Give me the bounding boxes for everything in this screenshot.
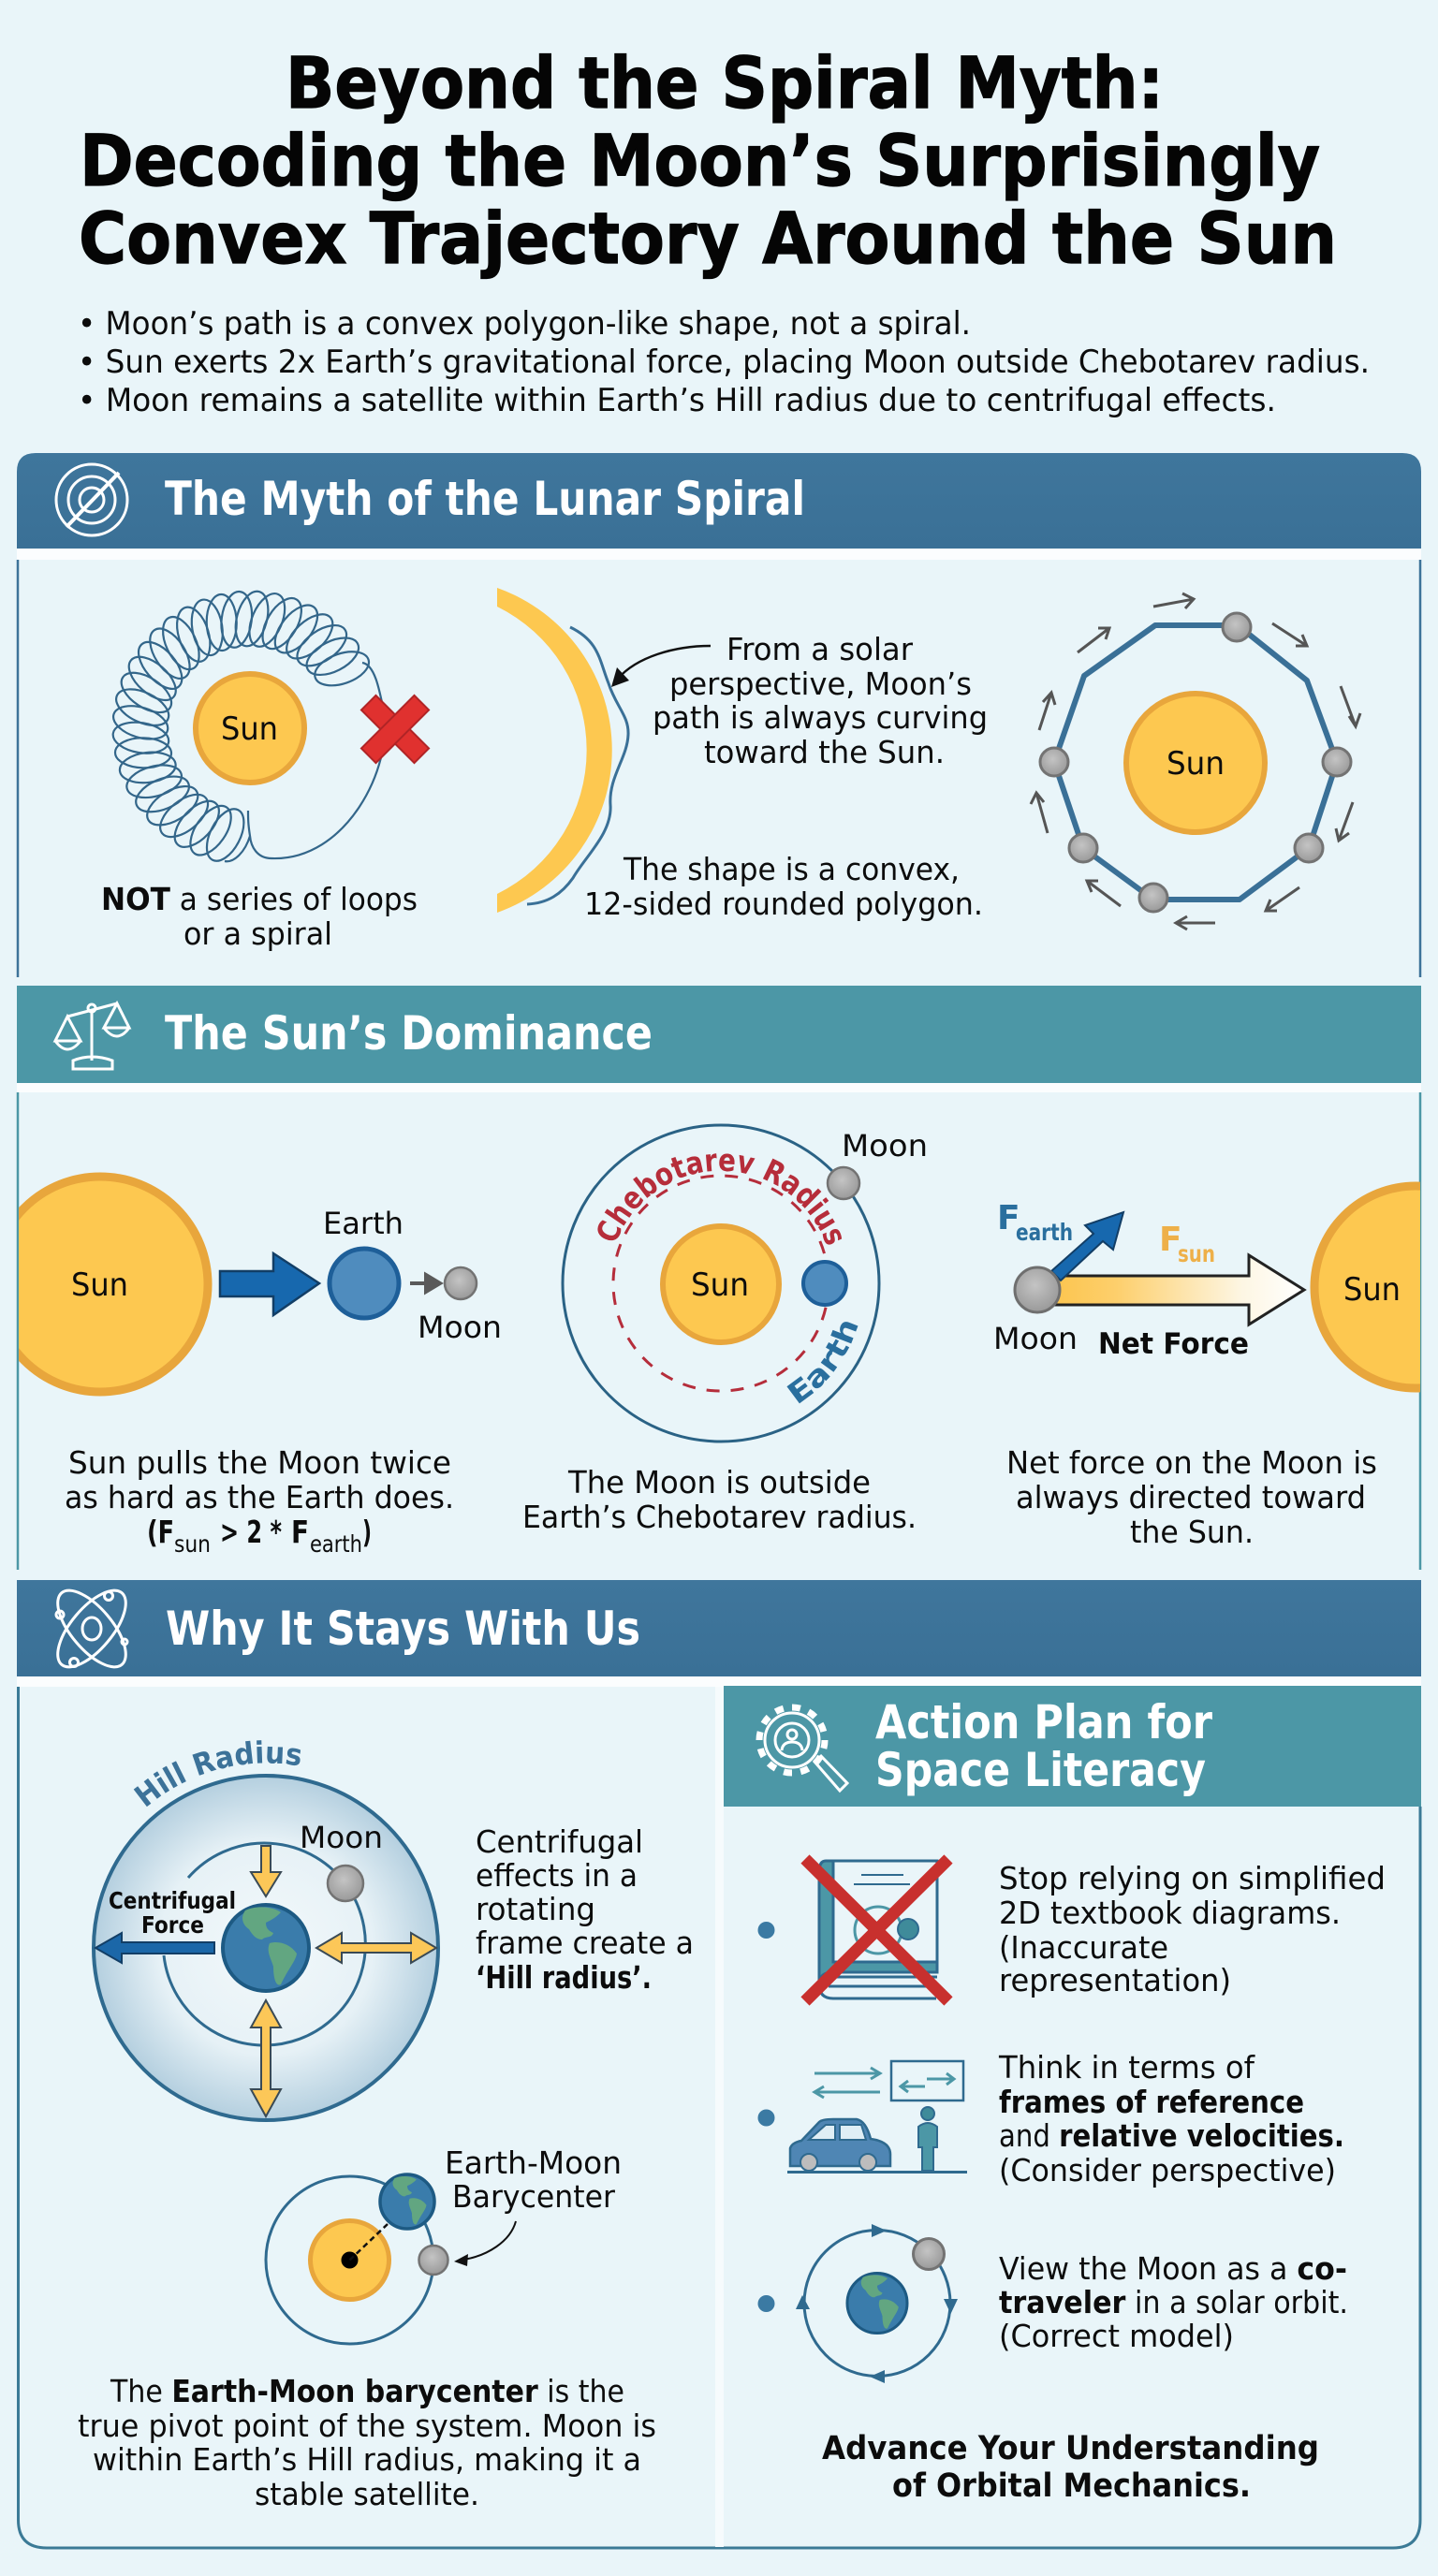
curved label: hill radius: Hill Radius xyxy=(133,1740,301,1807)
caption: barycenter: The Earth-Moon barycenter is the xyxy=(110,2373,624,2409)
text: centrifugal effects: Centrifugal xyxy=(476,1823,643,1860)
caption: pulls twice: earth xyxy=(310,1530,362,1558)
text: stop relying: 2D textbook diagrams. xyxy=(999,1895,1341,1931)
diagram: spiral loops around sun xyxy=(101,588,429,952)
icon: red X xyxy=(361,695,429,763)
sun: Sun xyxy=(221,710,278,748)
key takeaways bullets: • Moon’s path is a convex polygon-like shape, not a spiral. xyxy=(78,305,971,343)
callout text: perspective: path is always curving xyxy=(653,699,988,736)
arrow: centrifugal force xyxy=(95,1933,214,1963)
sun: Sun xyxy=(691,1266,749,1304)
caption: barycenter: true pivot point of the system. Moon is xyxy=(78,2408,656,2444)
earth: Earth xyxy=(323,1206,404,1241)
moon xyxy=(1015,1267,1060,1312)
arrow: net force xyxy=(1054,1255,1304,1325)
section header: myth: The Myth of the Lunar Spiral xyxy=(165,472,805,526)
icon: car, observer and frame xyxy=(787,2061,967,2172)
icon: atom xyxy=(46,1580,138,1677)
moon xyxy=(418,1267,502,1345)
earth xyxy=(786,1260,858,1404)
sun: Sun xyxy=(1167,745,1225,783)
text: co-traveler: View the Moon as a co- xyxy=(999,2250,1347,2287)
text: co-traveler: traveler in a solar orbit. xyxy=(999,2284,1348,2320)
spiral loops xyxy=(110,588,385,867)
text: stop relying xyxy=(999,1860,1386,1998)
caption: pulls twice: sun xyxy=(174,1530,211,1558)
label: F sun: F xyxy=(1159,1221,1182,1259)
label: centrifugal force xyxy=(109,1887,236,1939)
label: barycenter: Barycenter xyxy=(452,2178,615,2215)
panel: action plan xyxy=(724,1686,1421,2505)
sun xyxy=(1314,1186,1438,1388)
section header: dominance: The Sun’s Dominance xyxy=(165,1006,653,1061)
big sun: Sun xyxy=(71,1266,128,1304)
text: centrifugal effects: ‘Hill radius’. xyxy=(476,1959,652,1996)
label: net force: Net Force xyxy=(1098,1327,1249,1361)
callout text: perspective xyxy=(653,631,988,770)
label: moon: Moon xyxy=(993,1321,1078,1356)
diagram: hill radius xyxy=(92,1740,694,2122)
diagram: convex polygon orbit xyxy=(1031,593,1360,929)
caption: net force xyxy=(1006,1444,1377,1550)
action item 2: frames of reference xyxy=(758,2049,1344,2188)
moon: Moon xyxy=(842,1128,928,1164)
text: frames of reference: and relative velocities. xyxy=(999,2117,1344,2154)
caption: net force: the Sun. xyxy=(1130,1514,1254,1550)
sun with barycenter dot xyxy=(311,2220,389,2299)
diagram: solar perspective arc xyxy=(497,588,988,922)
caption: pulls twice: > 2 * xyxy=(220,1514,282,1550)
label: barycenter xyxy=(445,2144,622,2215)
icon: gear and magnifier xyxy=(759,1707,847,1791)
moon xyxy=(300,1820,383,1901)
caption: pulls twice: F xyxy=(291,1514,309,1550)
moon: Moon xyxy=(418,1310,502,1345)
earth xyxy=(323,1206,404,1318)
title xyxy=(79,41,1337,280)
text: stop relying: Stop relying on simplified xyxy=(999,1860,1386,1896)
direction arrows xyxy=(1031,593,1360,929)
arrow: callout pointer xyxy=(611,646,711,687)
callout text: shape: 12-sided rounded polygon. xyxy=(584,886,983,922)
text: frames of reference xyxy=(998,2049,1344,2188)
panel: the sun's dominance xyxy=(17,986,1421,1570)
yellow force arrows xyxy=(251,1846,436,2116)
caption: not loops xyxy=(101,881,418,952)
label: centrifugal force: Centrifugal xyxy=(109,1887,236,1914)
label: barycenter: Earth-Moon xyxy=(445,2144,622,2181)
caption: barycenter: stable satellite. xyxy=(255,2476,479,2512)
moon wavy path xyxy=(527,627,628,904)
caption: pulls twice: as hard as the Earth does. xyxy=(65,1479,454,1515)
text: stop relying: representation) xyxy=(999,1962,1231,1998)
caption: pulls twice: Sun pulls the Moon twice xyxy=(68,1444,451,1481)
label: F sun: sun xyxy=(1178,1240,1215,1267)
heading: action plan: Action Plan for xyxy=(875,1695,1212,1749)
closing call to action: Advance Your Understanding xyxy=(822,2430,1319,2467)
key takeaways bullets xyxy=(78,305,1370,419)
action item 1: stop textbook diagrams xyxy=(758,1859,1386,2001)
caption: pulls twice: (F xyxy=(147,1514,174,1550)
text: frames of reference: (Consider perspective) xyxy=(999,2152,1336,2188)
section header: why it stays: Why It Stays With Us xyxy=(166,1602,640,1656)
title: Decoding the Moon’s Surprisingly xyxy=(80,119,1320,202)
arrow: F earth xyxy=(1051,1212,1123,1281)
callout text: perspective: perspective, Moon’s xyxy=(669,666,972,702)
callout text: perspective: From a solar xyxy=(726,631,913,667)
text: frames of reference: Think in terms of xyxy=(998,2049,1255,2086)
label: F earth xyxy=(997,1199,1073,1246)
diagram: net force xyxy=(993,1186,1438,1550)
caption: outside radius: Earth’s Chebotarev radius. xyxy=(522,1499,917,1535)
callout text: perspective: toward the Sun. xyxy=(704,734,945,770)
caption: barycenter xyxy=(78,2373,656,2512)
action item 3: co-traveler xyxy=(758,2224,1348,2383)
callout text: shape xyxy=(584,851,983,922)
diagram: barycenter xyxy=(78,2144,656,2512)
curved label: chebotarev radius: Chebotarev Radius xyxy=(597,1153,843,1245)
icon: balance scales xyxy=(55,1003,129,1069)
moon: Moon xyxy=(300,1820,383,1855)
solar arc xyxy=(497,588,612,913)
text: stop relying: (Inaccurate xyxy=(999,1929,1168,1966)
caption: outside radius: The Moon is outside xyxy=(567,1464,871,1500)
diagram: chebotarev radius xyxy=(522,1123,928,1535)
label: F sun xyxy=(1159,1221,1215,1267)
panel frame xyxy=(19,1687,1420,2548)
section header: dominance xyxy=(17,986,1421,1092)
caption: net force: Net force on the Moon is xyxy=(1006,1444,1377,1481)
caption: not loops: NOT a series of loops xyxy=(101,881,418,917)
key takeaways bullets: • Sun exerts 2x Earth’s gravitational force, placing Moon outside Chebotarev radius. xyxy=(78,344,1370,381)
panel: why it stays with us xyxy=(17,1580,1421,2550)
text: centrifugal effects: rotating xyxy=(476,1891,595,1927)
icon: crossed-out textbook xyxy=(805,1859,948,2001)
icon: crossed-out spiral xyxy=(56,464,127,535)
section header: action plan xyxy=(724,1686,1421,1807)
label: centrifugal force: Force xyxy=(141,1911,204,1939)
moons xyxy=(1040,613,1351,912)
key takeaways bullets: • Moon remains a satellite within Earth’s Hill radius due to centrifugal effects. xyxy=(78,382,1276,419)
label: F earth: earth xyxy=(1016,1219,1073,1246)
caption: barycenter: within Earth’s Hill radius, making it a xyxy=(93,2441,641,2478)
moon xyxy=(828,1128,928,1199)
earth: Earth xyxy=(786,1322,858,1404)
closing call to action: of Orbital Mechanics. xyxy=(892,2467,1251,2505)
earth xyxy=(223,1905,309,1991)
sun xyxy=(196,674,304,783)
text: co-traveler xyxy=(999,2250,1348,2354)
text: frames of reference: frames of reference xyxy=(999,2084,1304,2120)
text: centrifugal effects xyxy=(476,1823,694,1996)
arrow: pull xyxy=(220,1253,319,1315)
caption: net force: always directed toward xyxy=(1016,1479,1366,1515)
sun xyxy=(1126,694,1265,832)
moon xyxy=(419,2246,448,2275)
caption: pulls twice xyxy=(65,1444,454,1558)
sun xyxy=(663,1226,779,1342)
earth xyxy=(380,2174,434,2229)
caption: pulls twice: ) xyxy=(362,1514,372,1550)
text: centrifugal effects: frame create a xyxy=(476,1925,694,1961)
caption: not loops: or a spiral xyxy=(183,915,332,952)
arrow: small xyxy=(410,1275,440,1292)
heading: action plan xyxy=(875,1695,1212,1797)
title: Beyond the Spiral Myth: xyxy=(286,41,1164,124)
panel: the myth of the lunar spiral xyxy=(17,453,1421,977)
icon: earth and moon orbit xyxy=(796,2224,958,2383)
text: co-traveler: (Correct model) xyxy=(999,2318,1234,2354)
section header: why it stays xyxy=(17,1580,1421,1687)
sun: Sun xyxy=(1343,1271,1401,1309)
caption: outside radius xyxy=(522,1464,917,1535)
big sun xyxy=(0,1177,208,1392)
arrow: barycenter pointer xyxy=(454,2221,516,2266)
heading: action plan: Space Literacy xyxy=(875,1743,1206,1797)
section header: myth xyxy=(17,453,1421,560)
diagram: sun pulls moon xyxy=(0,1177,502,1558)
callout text: shape: The shape is a convex, xyxy=(623,851,960,887)
label: F earth: F xyxy=(997,1199,1020,1237)
text: centrifugal effects: effects in a xyxy=(476,1857,638,1894)
title: Convex Trajectory Around the Sun xyxy=(79,197,1337,280)
closing call to action xyxy=(822,2430,1319,2505)
